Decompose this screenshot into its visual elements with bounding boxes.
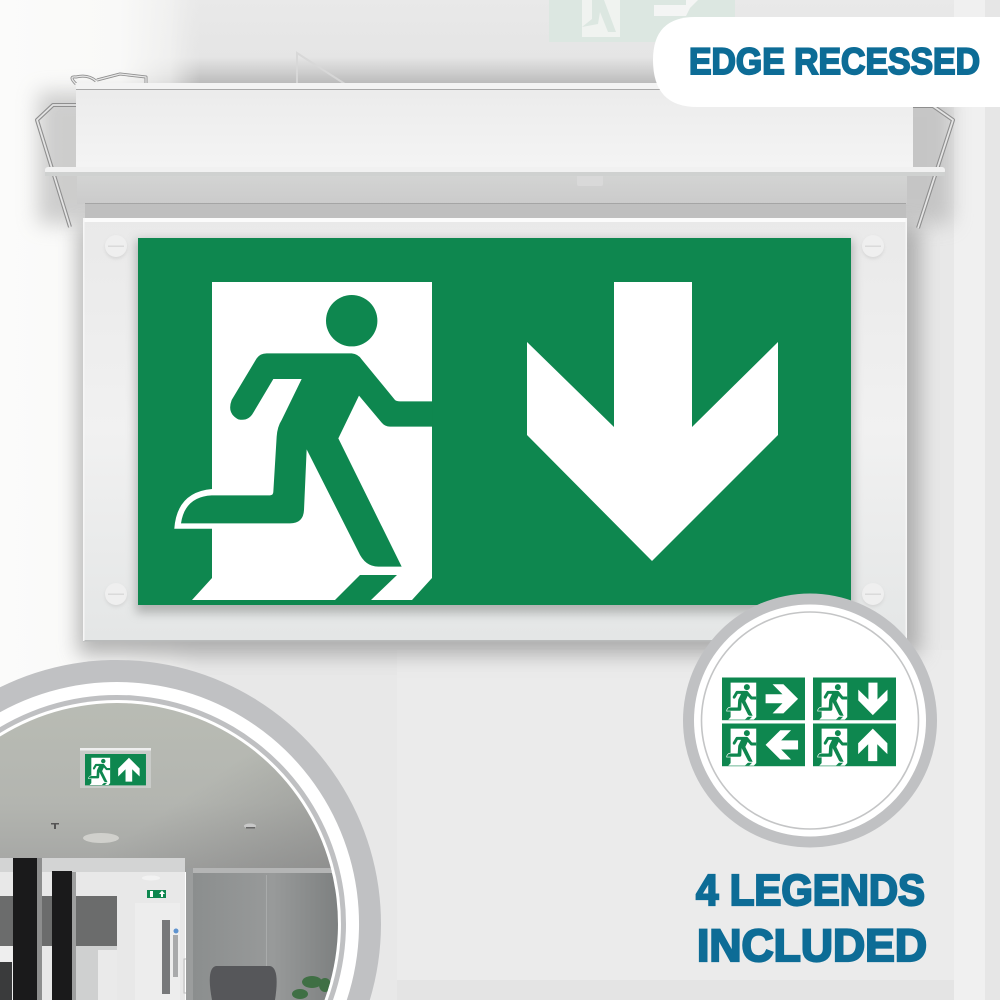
- glass wall: [193, 873, 353, 1000]
- clip right: [912, 106, 953, 228]
- photo: office interior: [0, 700, 353, 1000]
- caption: 4 legends included: INCLUDED: [697, 920, 927, 971]
- screws: [105, 235, 884, 607]
- ceiling exit sign: [80, 748, 151, 788]
- door: [135, 903, 180, 1000]
- shadow behind fitting: [38, 92, 952, 655]
- shadow under green panel: [136, 240, 853, 613]
- icon: running man and door: [174, 282, 432, 600]
- main exit sign panel: [138, 238, 851, 605]
- legend: up arrow: [813, 724, 896, 766]
- inset photo circle: [0, 660, 381, 1000]
- clip left: [37, 74, 146, 227]
- ceiling fittings: [83, 833, 119, 843]
- banner text: EDGE RECESSED: [689, 41, 980, 82]
- black columns: [13, 858, 37, 1000]
- legend: down arrow: [813, 678, 896, 720]
- faded background exit sign: [297, 0, 735, 84]
- legend: right arrow: [722, 678, 805, 720]
- acrylic plate: [83, 218, 907, 642]
- chair: [210, 966, 277, 1000]
- badge: four legends: [683, 594, 937, 848]
- caption: 4 legends included: [696, 866, 927, 971]
- plant: [292, 976, 331, 999]
- icon: down arrow: [527, 282, 778, 561]
- banner: edge recessed: [653, 17, 1000, 107]
- spring clips: [37, 74, 953, 228]
- small background exit sign: [147, 890, 166, 898]
- legend: left arrow: [722, 724, 805, 766]
- caption: 4 legends included: 4 LEGENDS: [696, 866, 925, 915]
- recessed housing: [45, 83, 945, 219]
